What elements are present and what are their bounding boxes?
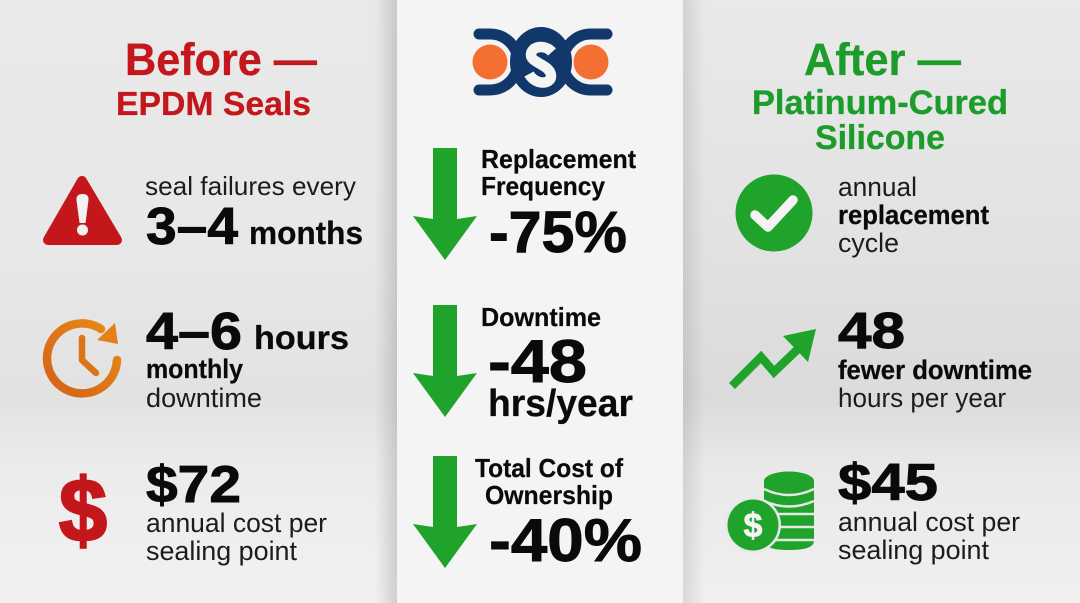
stat: seal failures: seal failures every xyxy=(145,171,356,201)
logo: DSC xyxy=(472,27,608,97)
metric: replacement frequency: Frequency xyxy=(481,171,605,201)
icon: dollar sign: $ xyxy=(59,460,107,560)
stat: monthly downtime: downtime xyxy=(146,383,262,413)
panel: left background xyxy=(0,0,397,603)
stat: annual cost before xyxy=(146,456,327,566)
stat: fewer downtime: fewer downtime xyxy=(838,355,1032,385)
metric: total cost of ownership: Total Cost of xyxy=(475,453,623,483)
metric: downtime xyxy=(481,302,633,425)
stat: fewer downtime: hours per year xyxy=(838,383,1006,413)
stat: monthly downtime: hours xyxy=(254,319,349,356)
stat: annual cost after: $45 xyxy=(838,454,938,512)
stat: monthly downtime xyxy=(146,303,349,413)
panel: before EPDM seals xyxy=(47,34,363,566)
metric: replacement frequency xyxy=(481,144,636,265)
stat: seal failures: months xyxy=(249,215,363,251)
stat: annual cost after: sealing point xyxy=(838,535,989,565)
icon: warning triangle xyxy=(48,181,117,240)
arrow: total cost down xyxy=(413,456,477,568)
heading: before xyxy=(116,34,317,122)
metric: total cost of ownership xyxy=(475,453,642,574)
stat: fewer downtime: 48 xyxy=(838,302,905,359)
metric: total cost of ownership: Ownership xyxy=(485,480,613,510)
stat: seal failures: 3–4 xyxy=(146,198,238,256)
heading: after: Silicone xyxy=(815,119,945,157)
stat: annual replacement: annual xyxy=(838,172,917,202)
metric: total cost of ownership: -40% xyxy=(489,507,642,574)
panel shadow: left edge of centre panel xyxy=(375,0,397,603)
heading: after xyxy=(752,34,1008,157)
heading: before: EPDM Seals xyxy=(116,85,311,122)
stat: monthly downtime: monthly xyxy=(146,354,243,384)
metric: replacement frequency: -75% xyxy=(489,200,627,265)
heading: before: Before — xyxy=(125,34,317,85)
panel shadow: right edge of centre panel xyxy=(683,0,705,603)
stat: annual replacement xyxy=(838,172,989,258)
arrow: replacement frequency down xyxy=(413,148,477,260)
heading: after: Platinum-Cured xyxy=(752,84,1008,122)
stat: monthly downtime: 4–6 xyxy=(146,303,242,361)
stat: fewer downtime xyxy=(838,302,1032,413)
icon: coins: $ xyxy=(744,507,763,545)
icon: coins xyxy=(725,472,814,553)
stat: annual cost before: sealing point xyxy=(146,536,297,566)
stat: annual replacement: replacement xyxy=(838,200,989,230)
metric: downtime: -48 xyxy=(488,328,587,395)
metric: replacement frequency: Replacement xyxy=(481,144,636,174)
metric: downtime: hrs/year xyxy=(488,383,633,425)
stat: seal failures xyxy=(145,171,363,256)
stat: annual cost after xyxy=(838,454,1020,565)
panel: after platinum-cured silicone xyxy=(725,34,1032,565)
panel: right background xyxy=(683,0,1080,603)
panel: centre results xyxy=(397,0,683,603)
stat: annual cost before: $72 xyxy=(146,456,241,514)
icon: check circle xyxy=(736,174,812,252)
metric: downtime: Downtime xyxy=(481,302,601,332)
stat: annual cost before: annual cost per xyxy=(146,508,327,538)
heading: after: After — xyxy=(804,34,961,85)
stat: annual replacement: cycle xyxy=(838,228,899,258)
icon: clock with arrow xyxy=(47,323,118,393)
arrow: downtime down xyxy=(413,305,477,417)
stat: annual cost after: annual cost per xyxy=(838,507,1020,537)
icon: upward trend arrow xyxy=(732,329,816,386)
